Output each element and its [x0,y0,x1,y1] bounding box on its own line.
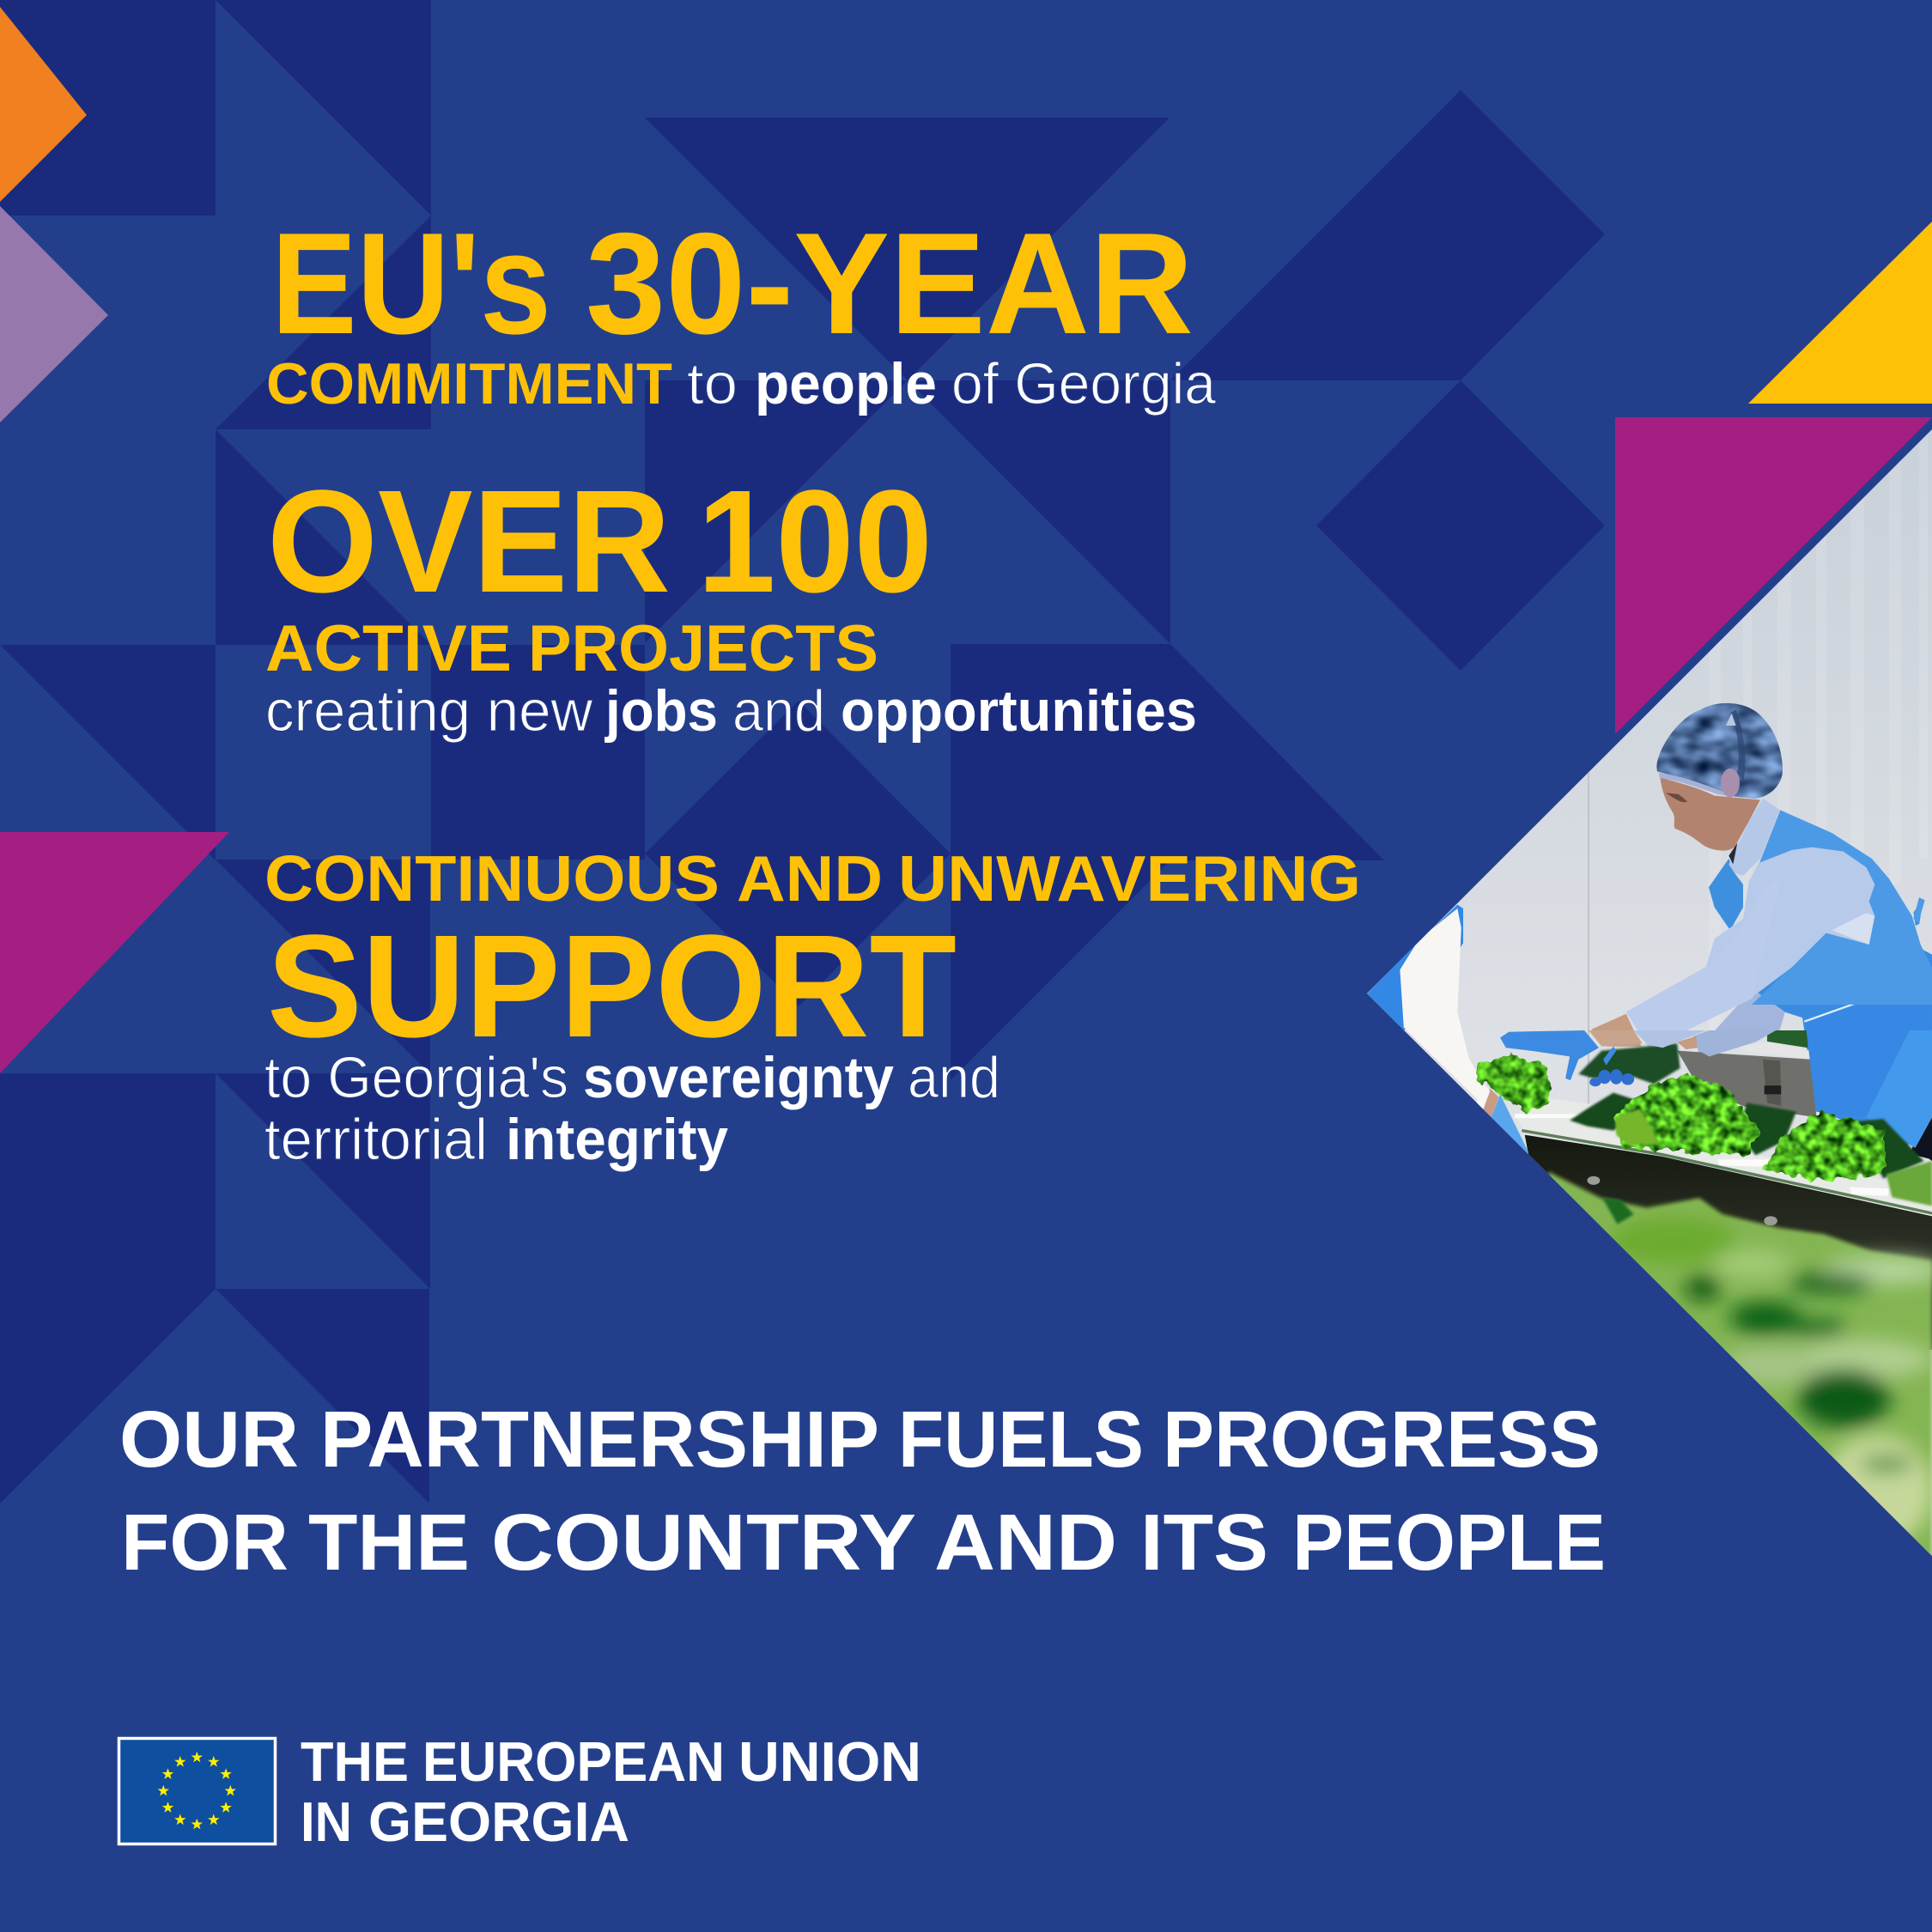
headline: over 100: 100 [697,460,933,623]
logo text: GEORGIA [368,1790,629,1853]
text: sovereignty and integrity: to Georgia's [264,1045,568,1110]
text: creating jobs: creating new [265,678,593,744]
photo: worker sorting lettuce [1365,429,1932,1589]
triangle: yellow [1748,222,1932,404]
triangle: orange [0,7,87,202]
subhead: active projects [265,612,878,685]
headline: 30-year: EU's [271,203,551,364]
icon: EU flag [118,1738,275,1844]
closing statement: PEOPLE [1292,1498,1606,1587]
tray [1515,1098,1932,1216]
closing statement [119,1394,1606,1587]
text: sovereignty and integrity: sovereignty [583,1045,894,1110]
far arm [1697,993,1785,1053]
triangle: lavender [0,206,108,422]
lettuce heads [1477,1055,1932,1206]
headline: 30-year: 30-YEAR [586,203,1194,364]
subhead: commitment [266,351,1216,416]
closing statement: PROGRESS [1163,1394,1601,1484]
text: creating jobs: jobs [604,678,718,744]
subhead: commitment: people [755,351,937,416]
logo text [301,1730,921,1853]
subhead: commitment: to [687,351,738,416]
subhead: continuous and unwavering [264,842,1361,914]
colleague [1367,905,1463,1031]
triangle: magenta left [0,832,229,1073]
blurred foreground lettuce [1548,1172,1932,1589]
table behind [1677,1051,1817,1117]
text: sovereignty and integrity [264,1045,1000,1172]
text: creating jobs: opportunities [841,678,1197,744]
herbs in hand [1578,1043,1680,1084]
colleague arm [1483,1089,1498,1117]
text: sovereignty and integrity: and [908,1045,1000,1110]
dark herbs [1570,1093,1924,1178]
headline: support: SUPPORT [267,905,957,1068]
text: creating jobs: and [732,678,825,744]
headline: 30-year [271,203,1194,364]
closing statement: FOR [121,1498,289,1587]
closing statement: AND [934,1498,1117,1587]
collar [1728,799,1780,876]
subhead: continuous and unwavering: CONTINUOUS [264,842,720,914]
logo text: THE [301,1730,409,1793]
subhead: active projects: PROJECTS [528,612,878,685]
headline: over 100: OVER [267,460,671,623]
closing statement: FUELS [898,1394,1144,1484]
counter underside [1525,1135,1932,1350]
closing statement: COUNTRY [491,1498,916,1587]
hairnet [1656,703,1783,799]
closing statement: PARTNERSHIP [320,1394,879,1484]
far sleeve [1693,1030,1776,1056]
logo text: EUROPEAN [422,1730,725,1793]
subhead: commitment: COMMITMENT [266,351,672,416]
face [1660,777,1760,851]
subhead: continuous and unwavering: UNWAVERING [898,842,1361,914]
logo text: UNION [738,1730,921,1793]
worker apron base [1758,945,1932,1145]
near arm [1626,967,1753,1048]
triangle: magenta right [1615,417,1932,839]
apron skirt [1807,1030,1932,1148]
logo text: IN [301,1790,352,1853]
geometric pattern [0,0,1605,1504]
subhead: active projects: ACTIVE [265,612,512,685]
text: sovereignty and integrity: territorial [264,1107,488,1172]
worker upper body [1752,810,1932,1005]
subhead: commitment: of Georgia [951,351,1216,416]
headline: over 100 [267,460,933,623]
text: creating jobs [265,678,1197,744]
glove [1500,1030,1599,1080]
closing statement: THE [308,1498,470,1587]
text: sovereignty and integrity: integrity [506,1107,728,1172]
closing statement: ITS [1140,1498,1268,1587]
subhead: continuous and unwavering: AND [737,842,883,914]
closing statement: OUR [119,1394,299,1484]
